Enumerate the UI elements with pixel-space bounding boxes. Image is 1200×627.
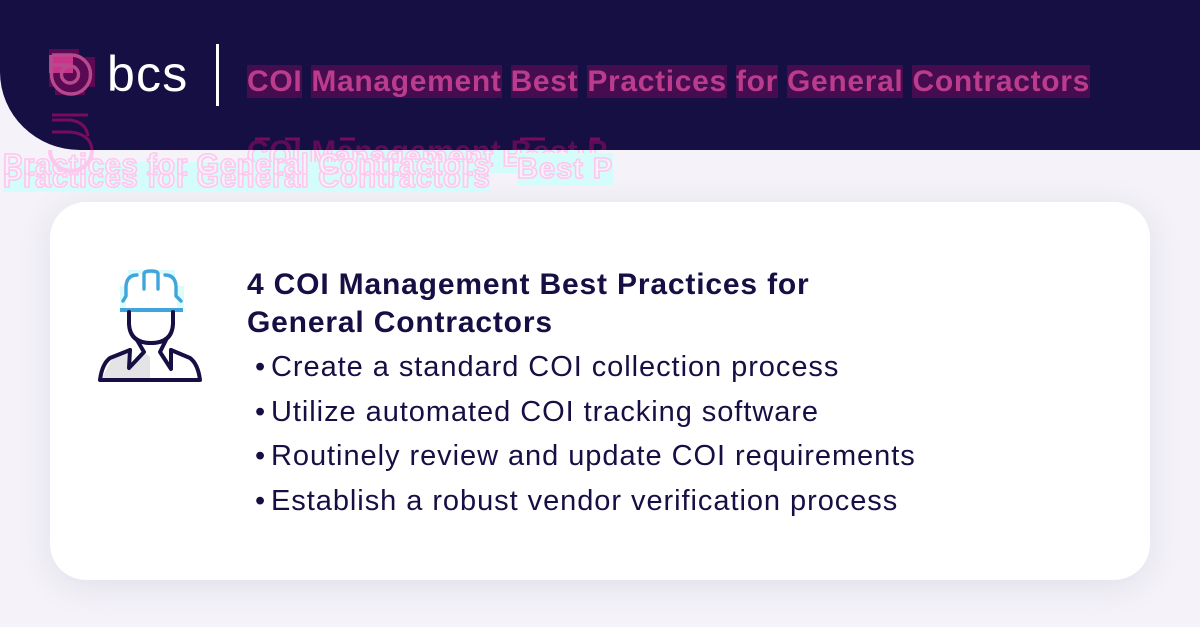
bullet 1: • bbox=[255, 351, 265, 383]
logo mark bbox=[49, 49, 95, 96]
card heading bbox=[247, 268, 810, 339]
card heading: 4 COI Management Best Practices for bbox=[247, 268, 810, 301]
bullet 2: Utilize automated COI tracking software bbox=[271, 396, 819, 428]
header band bbox=[0, 0, 1200, 150]
glitch ghost text on dark band bbox=[52, 114, 608, 150]
bullet 4: • bbox=[255, 485, 265, 517]
ghost logo fragment on dark band bbox=[52, 114, 600, 150]
bullet 2: • bbox=[255, 396, 265, 428]
logo wordmark: bcs bbox=[107, 46, 188, 102]
ghost logo fragment bbox=[48, 150, 94, 173]
card heading: General Contractors bbox=[247, 306, 553, 339]
logo bbox=[49, 46, 188, 102]
header title: COI Management Best Practices for General Contractors bbox=[247, 65, 1090, 98]
bullet 1: Create a standard COI collection process bbox=[271, 351, 839, 383]
bullet 4: Establish a robust vendor verification process bbox=[271, 485, 898, 517]
white content card bbox=[50, 202, 1150, 580]
ghost line: best fragment lower copy: Best P bbox=[517, 153, 613, 185]
header divider bbox=[216, 44, 219, 106]
bullet 3: • bbox=[255, 440, 265, 472]
glitch ghost text on light background bbox=[3, 150, 613, 192]
bullet 3: Routinely review and update COI requirements bbox=[271, 440, 916, 472]
icon: construction worker bbox=[98, 269, 202, 382]
